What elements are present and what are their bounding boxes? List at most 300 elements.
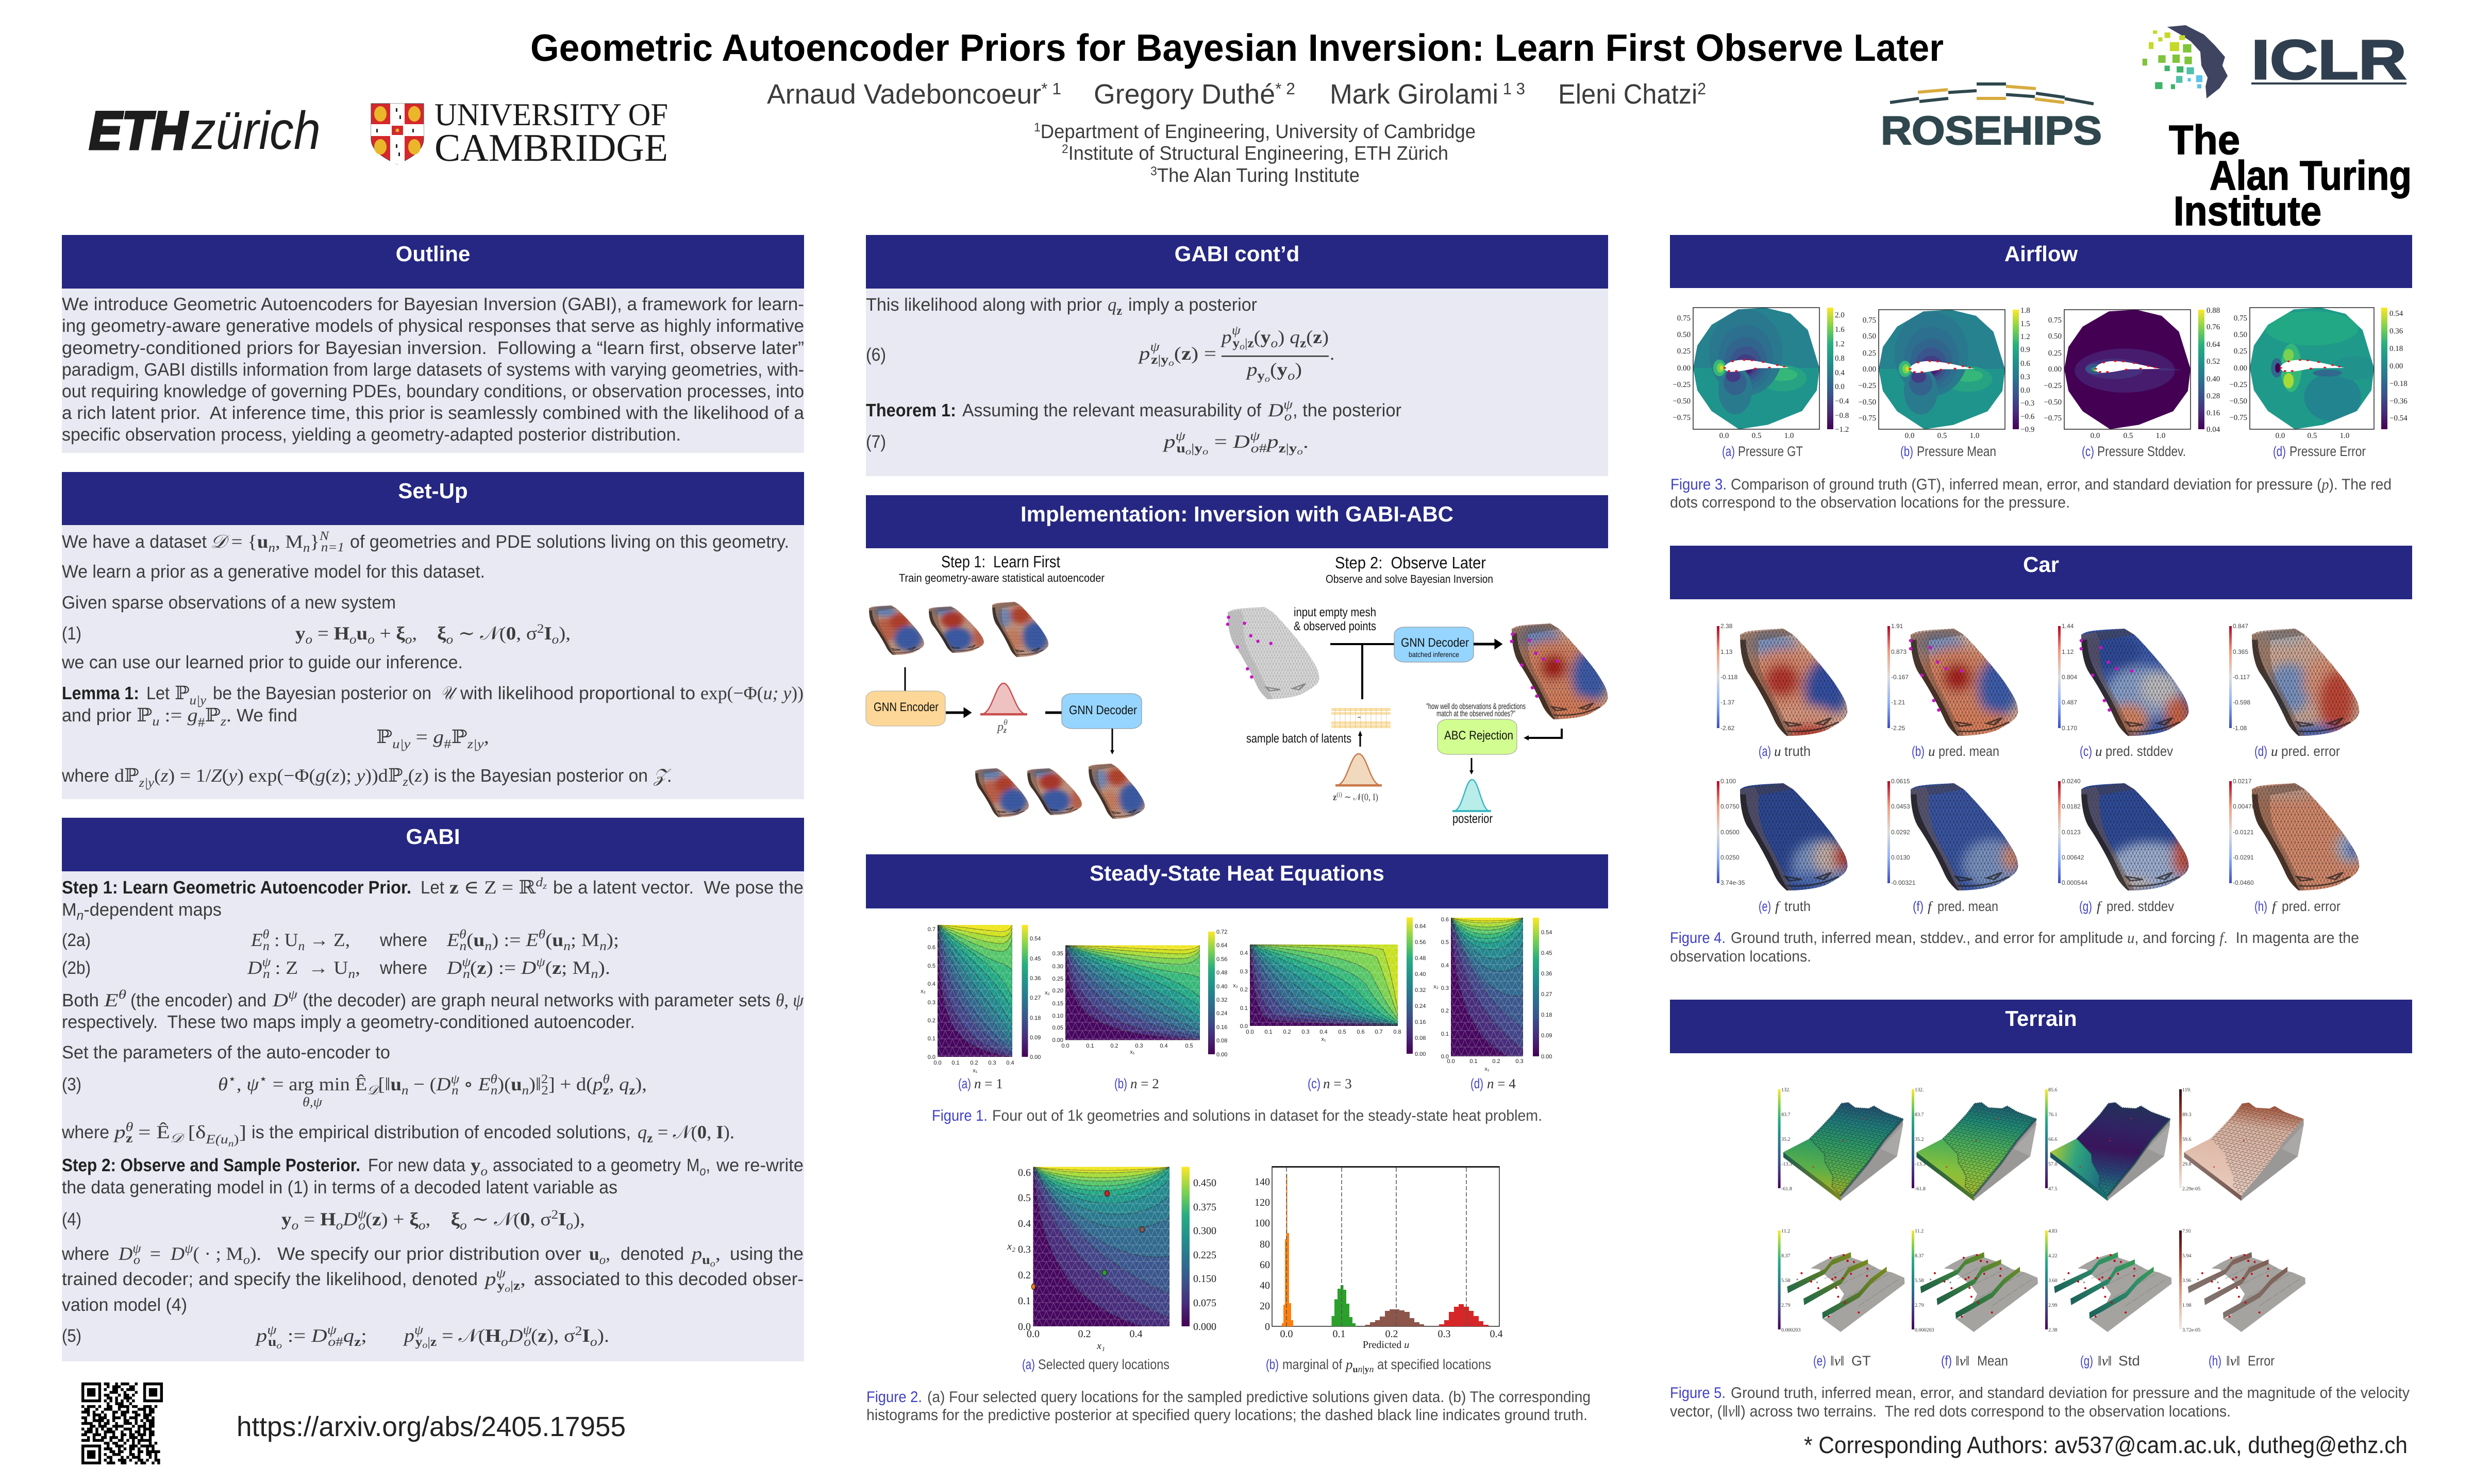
captions: figure 1 subfigures: (b) [1114,1076,1127,1091]
chart: pressure GT: 0.00 [1677,364,1691,373]
chart: selected query locations: 0.6 [1018,1167,1031,1178]
captions: figure 4 row 1: u [2095,744,2102,759]
authors: Eleni Chatzi [1558,79,1707,110]
heading: GABI cont'd [866,235,1608,289]
chart: pressure mean: 0.9 [2020,346,2030,354]
chart: n=1: x₁ [973,1068,978,1074]
heading: Car [1670,546,2412,599]
histogram: orange [1282,1174,1293,1326]
caption: figure 2: (a) Four selected query locations for the sampled predictive solutions given data. (b) The corresponding [927,1389,1591,1406]
text block: encoder and decoder: respectively. These two maps imply a geometry-conditioned autoencoder. [62,1012,635,1032]
theorem 1: D [1268,400,1281,420]
chart: n=2: 0.35 [1052,951,1063,957]
text block: empirical distribution: 𝒟 [170,1132,186,1145]
equation 3: ∘ [459,1074,478,1094]
captions: figure 5 subfigures: GT [1851,1353,1871,1369]
chart: u pred stddev: 1.44 [2062,622,2074,630]
chart: pressure mean: −0.75 [1858,414,1876,423]
equation 4: o [358,1219,365,1233]
text block: prior and likelihood: o [599,1253,606,1267]
text block: lemma 1: ℙ [137,705,152,726]
text block: lemma 1: z) = 1/Z(y) exp(−Φ(g(z); y))dℙ [161,765,400,786]
chart: pressure GT: 1.6 [1835,326,1845,334]
equation 5: o [328,1335,336,1349]
equation 6: p [1222,327,1231,347]
chart: n=4: 0.6 [1441,917,1449,923]
equation 5: D [311,1325,325,1346]
equation 7: o [1297,446,1303,457]
chart: n=3: 0.3 [1240,969,1248,975]
captions: figure 4 row 1: truth [1784,744,1811,759]
heading: GABI cont'd: GABI cont’d [1175,242,1299,266]
equation 2b: ( [545,957,552,978]
equation 3: = arg min Ê [268,1074,367,1094]
equation 2a [62,927,619,953]
equation 1: = [312,623,334,644]
chart: pressure error: 0.75 [2234,314,2247,323]
panel: Car [1670,546,2412,965]
equation 3: (3) [62,1074,81,1094]
captions: figure 4 row 2: f [1928,899,1933,914]
text block: lemma 1: is the Bayesian posterior on [434,766,648,786]
chart: n=2: 0.00 [1052,1037,1063,1043]
text block: step 2: the data generating model in (1) in terms of a decoded latent variable as [62,1177,617,1198]
text block: lemma 1: z|y [467,737,484,751]
connector: cars to encoder [904,667,906,691]
chart: posterior histograms: 0.3 [1438,1328,1450,1340]
equation 3: u [390,1074,402,1094]
text block: prior and likelihood: using the [730,1244,804,1264]
captions: figure 2 subfigures: at specified locations [1377,1357,1491,1372]
text block: lemma 1: ℙ [175,683,190,703]
chart: n=2: 0.00 [1216,1052,1227,1058]
equation 3: ⋆ [259,1072,268,1086]
box: GNN Decoder step 1 [1062,694,1142,729]
authors: Mark Girolami [1330,79,1503,110]
chart: pressure error: 0.0 [2276,432,2285,440]
text block: step 2 [62,1155,804,1198]
captions: figure 1 subfigures: n = 4 [1487,1076,1516,1091]
captions: figure 2 subfigures: (b) [1266,1357,1279,1372]
chart: n=1: 0.4 [928,981,935,987]
text block: empirical distribution [61,1120,734,1149]
chart: pressure error: −0.75 [2229,414,2247,422]
equation 2b: ψ [262,955,271,969]
chart: pressure error: −0.36 [2389,397,2408,406]
chart: f pred stddev [2058,778,2192,892]
text block: step 1 [62,875,804,923]
chart: terrain pressure mean: -13.3 [1915,1161,1926,1167]
chart: pressure mean: 0.25 [1863,349,1876,358]
authors: * 1 [1041,79,1061,98]
chart: terrain pressure error: 2.29e-05 [2182,1186,2200,1192]
captions: figure 5 subfigures: ‖v‖ [1830,1353,1844,1369]
chart: terrain pressure mean [1912,1087,2036,1201]
chart: n=2: 0.05 [1052,1025,1063,1031]
chart: n=1: 0.0 [928,1054,935,1060]
equation 6: o [1168,358,1174,368]
equation 3: θ,ψ [303,1094,323,1109]
box: ABC Rejection: ABC Rejection [1444,729,1513,743]
chart: posterior histograms: 100 [1255,1218,1270,1229]
captions: figure 1 subfigures: (c) [1308,1076,1320,1091]
affiliations [1034,121,1476,187]
authors: Gregory Duthé [1094,79,1276,110]
captions: figure 4 row 2: f [2272,899,2278,914]
chart: n=1: 0.54 [1030,936,1041,942]
equation 6: o [1271,336,1278,350]
captions: figure 2 subfigures [1022,1357,1491,1374]
chart: n=2: x₂ [1045,990,1050,996]
equation 5: o [590,1335,597,1349]
captions: figure 2 subfigures: un|yn [1352,1364,1374,1374]
chart: n=2: 0.1 [1086,1043,1094,1049]
prior label: ∼ 𝒩(0, I) [1342,792,1378,803]
equation 4: y [281,1209,292,1229]
chart: n=4: 0.0 [1447,1058,1455,1065]
equation 7: o [1185,446,1191,457]
equation 7: y [1194,442,1203,456]
equation 6: z) [1313,327,1328,347]
equation 6: ) [1295,359,1302,380]
chart: n=3: 0.2 [1240,987,1248,993]
chart: n=2: 0.16 [1216,1024,1227,1031]
equation 5: I [582,1325,590,1346]
equation 1: o [552,633,559,647]
icon: posterior gaussian [1452,780,1491,812]
equation 7 [866,429,1309,457]
logo: University of Cambridge: CAMBRIDGE [434,126,668,170]
chart: u truth: -2.62 [1720,724,1735,732]
equation 4 [62,1207,585,1233]
chart: n=2: 0.2 [1110,1043,1118,1049]
chart: n=1: 0.5 [928,963,935,969]
equation 6: y [1277,359,1288,380]
heading: Implementation: Implementation: Inversion with GABI-ABC [1021,502,1453,526]
chart: n=3: 0.64 [1415,923,1426,930]
heading: Outline [62,235,804,289]
equation 5: ψ [414,1323,424,1337]
chart: pressure stddev: 0.16 [2206,409,2220,417]
chart: pressure GT: 0.75 [1677,314,1691,323]
title: Geometric Autoencoder Priors for Bayesian Inversion: Learn First Observe Later [530,26,1944,69]
equation 3: q [619,1074,628,1094]
caption: figure 3: dots correspond to the observation locations for the pressure. [1670,494,2070,511]
histogram: red [1439,1304,1489,1326]
equation 1: ∼ 𝒩( [453,623,506,644]
chart: u pred mean: -1.21 [1891,699,1905,706]
latent label: z [1003,726,1007,735]
equation 1: y [295,623,306,644]
text block: lemma 1: # [198,716,205,730]
equation 4: D [342,1209,358,1229]
authors: 2 [1697,79,1706,98]
chart: n=2: 0.56 [1216,956,1227,963]
captions: figure 5 subfigures: ‖v‖ [2226,1353,2240,1369]
logo: Alan Turing Institute [2169,117,2412,234]
chart: velocity mean: 8.37 [1915,1253,1924,1259]
predicted car [1510,623,1609,720]
text block: prior and likelihood: where [61,1244,109,1264]
text block: step 1: z [542,881,547,891]
chart: selected query locations: x₁ [1096,1340,1105,1352]
text block: dataset: of geometries and PDE solutions living on this geometry. [350,532,789,552]
captions: figure 5 subfigures [1813,1353,2275,1369]
chart: n=2: x₁ [1130,1049,1135,1055]
chart: f pred stddev: 0.000544 [2062,879,2087,886]
text block: prior and likelihood: o [710,1258,715,1269]
text block: lemma 1: 𝒰 [441,683,457,703]
chart: n=1: 0.7 [928,926,935,933]
chart: n=1: 0.1 [951,1060,960,1066]
box: GNN Decoder step 1: GNN Decoder [1069,703,1137,717]
text block: step 2: associated to a geometry [493,1155,681,1175]
chart: pressure mean [1858,307,2035,440]
text block: empirical distribution: z [647,1132,653,1145]
text block: empirical distribution: z [126,1132,132,1145]
theorem 1: ψ [1283,398,1293,412]
captions: figure 3 subfigures [1722,444,2366,459]
chart: pressure mean: 1.0 [1970,432,1979,440]
text block: encoder and decoder: Both [62,990,99,1010]
chart: u pred mean: -2.25 [1891,724,1905,732]
equation 2a: n [263,939,270,953]
text block: prior and likelihood: ψ [132,1242,141,1256]
logo: Alan Turing Institute: Institute [2174,188,2321,234]
chart: pressure error: 0.36 [2389,327,2403,335]
text block: lemma 1: g [433,727,442,747]
equation 4: ξ [451,1209,460,1229]
caption: figure 2: Figure 2. [866,1389,922,1406]
chart: n=3: 0.48 [1415,955,1426,962]
equation 1: 0, σ [506,623,536,644]
text block: step headings: Train geometry-aware statistical autoencoder [899,571,1105,584]
captions: figure 5 subfigures: (f) [1941,1353,1952,1369]
chart: pressure error [2229,308,2408,440]
equation 1: ), [559,623,571,644]
heading: Terrain: Terrain [2005,1006,2077,1031]
panel: GABI [61,818,804,1361]
equation 3: ), [635,1074,647,1094]
text block: lemma 1: = [410,727,433,747]
text block: lemma 1: z) [414,765,428,786]
caption: figure 3 [1670,476,2392,511]
latent batch matrix [1331,708,1391,728]
text block: prior and likelihood: | [510,1279,513,1293]
captions: figure 4 row 2: truth [1784,899,1811,914]
chart: n=3: 0.16 [1415,1019,1426,1025]
equation 3: [‖ [378,1074,390,1094]
text block: lemma 1: 𝒵. [653,765,672,786]
text block: step 2: o [699,1164,706,1178]
equation 6: ψ [1150,340,1160,354]
captions: figure 1 subfigures: n = 1 [974,1076,1003,1091]
chart: selected query locations: 0.375 [1193,1202,1216,1213]
equation 4: ψ [358,1207,366,1221]
text block: lemma 1: where [61,766,109,786]
equation 7: u [1176,442,1185,456]
text: matching question: match at the observed nodes?" [1436,710,1515,718]
chart: u pred mean: -0.167 [1891,673,1909,681]
equation 2a: n [563,939,571,953]
chart: pressure GT: −0.8 [1835,412,1849,420]
captions: figure 4 row 2: f [1775,899,1781,914]
connector: mesh and latents to decoder [1330,644,1394,699]
chart: n=4: 0.3 [1441,985,1449,991]
equation 4: o [566,1219,573,1233]
chart: n=2: 0.30 [1052,964,1063,970]
chart: terrain pressure std: 76.1 [2048,1112,2058,1118]
logo: ETH Zurich [89,101,321,161]
chart: n=1: 0.2 [928,1018,935,1024]
text block: lemma 1: u [152,715,159,729]
chart: u pred mean [1887,622,2019,737]
chart: velocity error: 1.98 [2182,1303,2192,1308]
text block: lemma 1: u|y [190,694,207,707]
chart: pressure GT: 0.5 [1752,432,1761,440]
text block: prior and likelihood: y [497,1279,505,1293]
chart: terrain pressure GT: 132. [1781,1087,1791,1093]
chart: posterior histograms: 20 [1260,1301,1270,1312]
text block: empirical distribution: q [638,1122,647,1142]
chart: selected query locations: 0.225 [1193,1250,1216,1261]
chart: selected query locations: 0.150 [1193,1273,1216,1285]
chart: posterior histograms: 0.1 [1333,1328,1345,1340]
icon: ICLR head [2143,25,2228,98]
theorem 1: , the posterior [1293,400,1401,420]
captions: figure 4 row 1: pred. mean [1938,744,1999,759]
chart: velocity GT: 8.37 [1781,1253,1791,1259]
text block: lemma 1 [61,652,804,790]
heading: GABI [62,818,804,871]
captions: figure 5 subfigures: Mean [1977,1353,2008,1369]
equation 2a: n [599,939,607,953]
chart: pressure mean: −0.25 [1858,382,1876,390]
equation 7: # [1259,442,1267,456]
captions: figure 4 row 2: (e) [1759,899,1771,914]
captions: figure 4 row 1: u [2271,744,2278,759]
chart: pressure error: 0.00 [2234,364,2247,373]
equation 2b: where [379,958,427,978]
captions: figure 3 subfigures: Pressure Stddev. [2097,444,2186,459]
chart: pressure stddev: 0.0 [2091,432,2100,440]
reconstructed cars [975,764,1145,819]
equation 3: n [491,1084,497,1098]
theorem 1: Theorem 1: [866,400,956,420]
caption: figure 5: Ground truth, inferred mean, error, and standard deviation for pressure and the magnitude of the velocity [1731,1385,2410,1402]
equation 7: z [1279,442,1286,456]
text block: posterior intro [866,294,1257,318]
text block: prior and likelihood: z [513,1279,520,1293]
equation 7: o [1251,442,1259,456]
equation 4: o [292,1219,298,1233]
chart: velocity std: 2.99 [2048,1303,2058,1308]
chart: u pred error: 0.365 [2233,648,2248,655]
text block: outline abstract: specific observation process, yielding a geometry-adapted posterior distribution. [62,425,681,445]
chart: velocity mean: 2.79 [1915,1303,1924,1308]
equation 2a: : U [270,930,298,950]
chart: selected query locations: 0.300 [1193,1225,1216,1237]
equation 5: z [354,1335,361,1349]
caption: figure 3: Figure 3. [1670,476,1727,493]
text block: prior and likelihood: p [485,1269,494,1289]
chart: pressure stddev: −0.75 [2044,414,2062,423]
text block: lemma 1: be the Bayesian posterior on [213,683,431,703]
equation 7: p [1164,431,1173,452]
text block: empirical distribution: n [228,1138,234,1149]
text block: encoder and decoder [62,988,804,1063]
equation 7: . [1303,431,1309,452]
text block: dataset [62,529,789,613]
chart: f truth: 3.74e-35 [1720,879,1745,886]
chart: posterior histograms: 0 [1265,1321,1270,1333]
text block: step 2: o [480,1165,488,1178]
equation 2a: E [526,930,537,950]
text block: lemma 1: # [444,737,452,751]
chart: selected query locations: 0.000 [1193,1321,1216,1333]
chart: pressure GT: 1.0 [1784,432,1794,440]
chart: velocity std [2045,1228,2171,1333]
latent label: θ [1004,718,1008,727]
text block: prior and likelihood: vation model (4) [62,1295,187,1315]
equation 4: ∼ 𝒩( [467,1209,520,1229]
chart: pressure GT: −0.4 [1835,397,1849,406]
equation 3: p [593,1074,602,1094]
equation 4: = [298,1209,320,1229]
chart: n=4: x₂ [1433,984,1439,990]
equation 6: o [1240,341,1245,351]
equation 6: z [1300,336,1306,350]
chart: n=2: 0.48 [1216,970,1227,976]
chart: posterior histograms: 0.0 [1280,1328,1293,1340]
chart: velocity mean: 5.58 [1915,1278,1924,1284]
chart: selected query locations: 0.4 [1130,1328,1142,1340]
equation 6: y [1257,369,1265,383]
text block: prior and likelihood: , [520,1269,526,1289]
chart: pressure mean: −0.3 [2020,399,2034,408]
caption: figure 2 [866,1389,1591,1424]
equation 2b: ). [598,957,610,978]
text block: empirical distribution: θ [126,1120,133,1134]
captions: figure 1 subfigures: n = 3 [1323,1076,1352,1091]
chart: velocity mean [1912,1228,2038,1333]
chart: pressure mean: 1.8 [2020,307,2030,315]
equation 6: y [1261,327,1271,347]
chart: terrain pressure GT [1778,1087,1903,1201]
equation 1: H [334,623,349,644]
chart: pressure mean: 0.50 [1863,332,1876,341]
text block: encoder and decoder: (the encoder) and [130,990,266,1010]
chart: u pred error [2229,622,2360,739]
chart: n=2: 0.4 [1160,1043,1168,1049]
chart: f pred mean: -0.00321 [1891,879,1916,886]
chart: n=3: 0.00 [1415,1051,1426,1057]
heading: Set-Up: Set-Up [398,479,468,503]
text block: step 1: be a latent vector. We pose the [553,878,804,898]
equation 6: o [1265,374,1270,384]
chart: n=2: 0.10 [1052,1013,1063,1019]
equation 3: ⋆ [228,1072,237,1086]
captions: figure 4 row 1: u [1928,744,1935,759]
equation 3: n [522,1084,529,1098]
text block: prior and likelihood [61,1242,804,1315]
equation 4: H [320,1209,336,1229]
text block: dataset: , M [275,531,303,552]
text block: encoder and decoder: θ [119,988,126,1002]
panel: Outline [62,235,805,453]
chart: pressure mean: 0.3 [2020,373,2030,381]
equation 7: (7) [866,432,886,452]
